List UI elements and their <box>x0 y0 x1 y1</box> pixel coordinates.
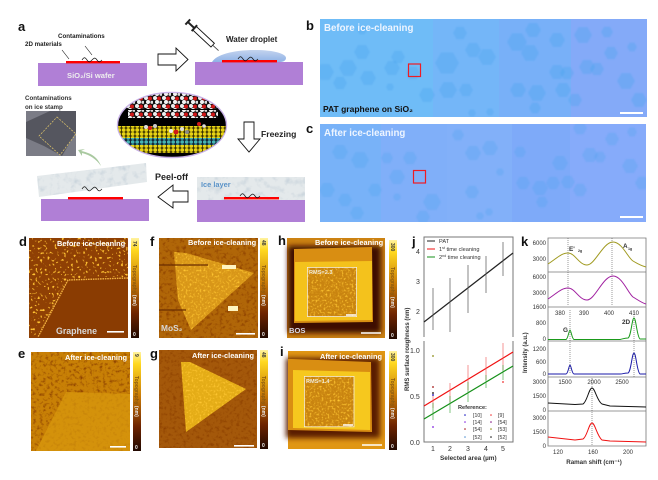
step 4: peeled ice and clean material <box>37 163 149 221</box>
contaminations on ice stamp photo <box>25 95 76 156</box>
colorbar d <box>131 238 139 338</box>
x tick labels <box>553 311 640 456</box>
tick labels: 3 <box>466 446 470 453</box>
series: PAT <box>424 242 513 332</box>
legend: series: 2 <box>439 255 442 261</box>
series: 1st time cleaning <box>424 343 513 408</box>
legend: series: time cleaning <box>446 255 481 261</box>
molecular model: ice on MoS2 <box>118 92 226 158</box>
panel e: AFM graphene after cleaning <box>18 346 141 451</box>
plot frame and axes <box>424 237 513 442</box>
colorbar e: 0 <box>135 445 138 451</box>
step 2: water droplet with syringe: Water droplet <box>226 35 278 44</box>
heading: After ice-cleaning <box>192 351 255 360</box>
panel letter b: b <box>306 18 314 33</box>
peak labels: G <box>563 327 568 334</box>
step 1: wafer with contaminated 2D material: SiO₂/Si wafer <box>67 71 115 80</box>
tick labels: 3 <box>416 279 420 286</box>
heading: Before ice-cleaning <box>315 238 384 247</box>
step 3: ice layer on wafer <box>197 177 305 222</box>
peak labels: 1g <box>628 247 632 251</box>
y tick labels: 3000 <box>533 416 547 422</box>
tick labels: 0.0 <box>410 440 420 447</box>
series: 2nd time cleaning <box>424 365 513 420</box>
AFM image e <box>31 352 130 451</box>
peak labels: A <box>623 243 628 250</box>
peak labels: 2D <box>622 319 631 326</box>
legend: series: st <box>442 246 445 250</box>
label: MoS2: MoS₂ <box>161 323 183 333</box>
legend: references <box>458 405 507 441</box>
y axis title: Intensity (a.u.) <box>523 332 529 373</box>
step 2: water droplet with syringe <box>184 18 303 85</box>
heading: before ice-cleaning: Before ice-cleaning <box>324 23 413 34</box>
x tick labels: 160 <box>588 450 599 456</box>
colorbar h: 300 <box>389 243 395 252</box>
panel letter i: i <box>280 344 284 359</box>
tick labels: 2 <box>448 446 452 453</box>
legend: series: 1 <box>439 247 442 253</box>
legend: series <box>427 239 481 261</box>
colorbar f <box>260 238 268 338</box>
step 1: wafer with contaminated 2D material <box>25 33 147 86</box>
arrow left: peel-off <box>158 185 188 208</box>
legend: references: [52] <box>498 435 507 441</box>
y tick labels: 800 <box>536 321 547 327</box>
AFM image f <box>159 238 258 338</box>
optical micrograph b <box>316 19 647 117</box>
colorbar d: 0 <box>133 332 136 338</box>
x tick labels: 400 <box>604 311 615 317</box>
colorbar h: Topography (nm) <box>389 267 395 308</box>
label: Graphene: Graphene <box>56 326 97 336</box>
red marker square <box>414 170 426 183</box>
colorbar g: Topography (nm) <box>260 376 266 417</box>
scale bar <box>234 445 254 447</box>
x tick labels: 2500 <box>615 380 629 386</box>
tick labels: 4 <box>416 249 420 256</box>
optical micrograph c <box>319 122 649 223</box>
y axis title: RMS surface roughness (nm) <box>405 308 411 391</box>
panel letter d: d <box>19 234 27 249</box>
tick labels: 0.5 <box>410 394 420 401</box>
y tick labels: 3000 <box>533 380 547 386</box>
colorbar e: Topography (nm) <box>133 376 139 417</box>
y tick labels: 0 <box>543 337 547 343</box>
tick labels: 4 <box>484 446 488 453</box>
panel letter j: j <box>411 234 416 249</box>
colorbar g: 0 <box>262 443 265 449</box>
panel letter g: g <box>150 346 158 361</box>
legend: references: [52] <box>473 435 482 441</box>
colorbar i: Topography (nm) <box>389 378 395 419</box>
y tick labels: 1500 <box>533 394 547 400</box>
colorbar e <box>133 352 141 451</box>
frames <box>548 238 646 446</box>
colorbar e: 9 <box>133 354 139 357</box>
tick labels <box>410 249 505 453</box>
x tick labels: 1500 <box>558 380 572 386</box>
y tick labels: 6000 <box>533 275 547 281</box>
scale bar <box>620 112 643 114</box>
legend: references: [54] <box>498 420 507 426</box>
heading: after ice-cleaning: After ice-cleaning <box>324 128 405 139</box>
scale bar <box>236 333 255 335</box>
panel letter h: h <box>278 233 286 248</box>
spectrum: purple <box>548 276 646 304</box>
y tick labels <box>533 241 547 450</box>
spectrum: olive <box>548 242 646 267</box>
panel h: AFM BOS before cleaning <box>278 233 397 339</box>
spectrum: blue <box>548 353 646 374</box>
x tick labels: 410 <box>629 311 640 317</box>
icon: syringe <box>184 18 221 54</box>
x axis title: Raman shift (cm⁻¹) <box>566 459 622 466</box>
scale bars <box>343 425 382 445</box>
panel i: AFM BOS after cleaning <box>280 344 397 450</box>
panel k: Raman spectra <box>521 234 646 466</box>
legend: references: [14] <box>473 420 482 426</box>
scale bar <box>620 216 643 218</box>
legend: series: time cleaning <box>445 247 479 253</box>
reference points <box>432 355 504 428</box>
colorbar h <box>389 240 397 339</box>
heading: Before ice-cleaning <box>57 239 126 248</box>
AFM image i <box>286 351 385 449</box>
panel g: AFM MoS2 after cleaning <box>150 346 268 449</box>
tick labels: 2 <box>416 309 420 316</box>
label: Freezing: Freezing <box>261 129 296 139</box>
panel letter f: f <box>150 234 155 249</box>
spectrum: red <box>548 423 646 442</box>
panel b: before ice-cleaning optical image <box>306 18 647 117</box>
y tick labels: 6000 <box>533 241 547 247</box>
label: PAT graphene on SiO2: PAT graphene on SiO₂ <box>323 104 413 114</box>
x tick labels: 200 <box>623 450 634 456</box>
y tick labels: 3000 <box>533 291 547 297</box>
panel f: AFM MoS2 before cleaning <box>150 234 268 338</box>
x tick labels: 2000 <box>587 380 601 386</box>
tick labels: 1.0 <box>410 348 420 355</box>
panel j: RMS roughness chart <box>405 234 513 462</box>
y tick labels: 1600 <box>533 305 547 311</box>
legend: references: [10] <box>473 413 482 419</box>
legend: references: Reference: <box>458 405 487 411</box>
colorbar d: Topography (nm) <box>131 265 137 306</box>
legend: references: [9] <box>498 413 504 419</box>
label: RMS value: RMS=1.4 <box>306 379 330 385</box>
legend: series: nd <box>442 254 446 258</box>
legend: references: [53] <box>498 427 507 433</box>
arrow right <box>158 48 188 71</box>
step 3: ice layer on wafer: Ice layer <box>201 180 231 189</box>
colorbar i <box>389 351 397 450</box>
y tick labels: 600 <box>536 360 547 366</box>
tick labels: 1 <box>431 446 435 453</box>
label: Peel-off: Peel-off <box>155 172 189 182</box>
peak labels <box>563 243 632 334</box>
panel letter e: e <box>18 346 25 361</box>
peak labels: E' <box>569 246 575 253</box>
contaminations on ice stamp photo: Contaminations <box>25 95 72 102</box>
scale bar <box>107 331 124 333</box>
x tick labels: 390 <box>579 311 590 317</box>
heading: After ice-cleaning <box>320 352 383 361</box>
contaminations on ice stamp photo: on ice stamp <box>25 104 63 111</box>
colorbar f: Topography (nm) <box>260 265 266 306</box>
colorbar g <box>260 350 268 449</box>
AFM image g <box>159 350 257 448</box>
spectrum: green <box>548 318 646 340</box>
y tick labels: 1200 <box>533 347 547 353</box>
y tick labels: 0 <box>543 444 547 450</box>
tick labels: 5 <box>501 446 505 453</box>
colorbar g: 48 <box>260 352 266 358</box>
dotted guide lines <box>568 238 634 446</box>
colorbar f: 0 <box>262 332 265 338</box>
peak labels: 2g <box>578 249 582 253</box>
label: RMS value: RMS=2.3 <box>309 270 332 276</box>
x tick labels: 120 <box>553 450 564 456</box>
colorbar d: 74 <box>131 241 137 247</box>
arrow down: freezing <box>238 122 260 152</box>
scale bars <box>346 315 381 333</box>
panel letter k: k <box>521 234 529 249</box>
red marker square <box>408 64 420 76</box>
x axis title: Selected area (µm) <box>440 455 497 462</box>
colorbar i: 300 <box>389 353 395 362</box>
y tick labels: 0 <box>543 372 547 378</box>
y tick labels: 1500 <box>533 430 547 436</box>
panel c: after ice-cleaning optical image <box>306 121 649 223</box>
y tick labels: 0 <box>543 408 547 414</box>
heading: Before ice-cleaning <box>188 238 257 247</box>
y tick labels: 3000 <box>533 257 547 263</box>
green curved arrow <box>78 149 101 166</box>
colorbar i: 0 <box>391 444 394 450</box>
step 1: wafer with contaminated 2D material: Contaminations <box>58 33 105 40</box>
step 1: wafer with contaminated 2D material: 2D materials <box>25 41 62 48</box>
AFM image d <box>29 238 128 338</box>
x tick labels: 380 <box>555 311 566 317</box>
spectrum: black <box>548 388 646 407</box>
heading: After ice-cleaning <box>65 353 128 362</box>
scale bar <box>110 446 126 448</box>
panel letter a: a <box>18 19 26 34</box>
panel a: ice-cleaning process schematic <box>18 18 305 222</box>
legend: references: [54] <box>473 427 482 433</box>
colorbar h: 0 <box>391 333 394 339</box>
panel d: AFM graphene before cleaning <box>19 234 139 338</box>
legend: series: PAT <box>439 239 450 245</box>
panel letter c: c <box>306 121 313 136</box>
AFM image h <box>287 238 385 338</box>
colorbar f: 48 <box>260 240 266 246</box>
label: BOS: BOS <box>289 326 305 335</box>
